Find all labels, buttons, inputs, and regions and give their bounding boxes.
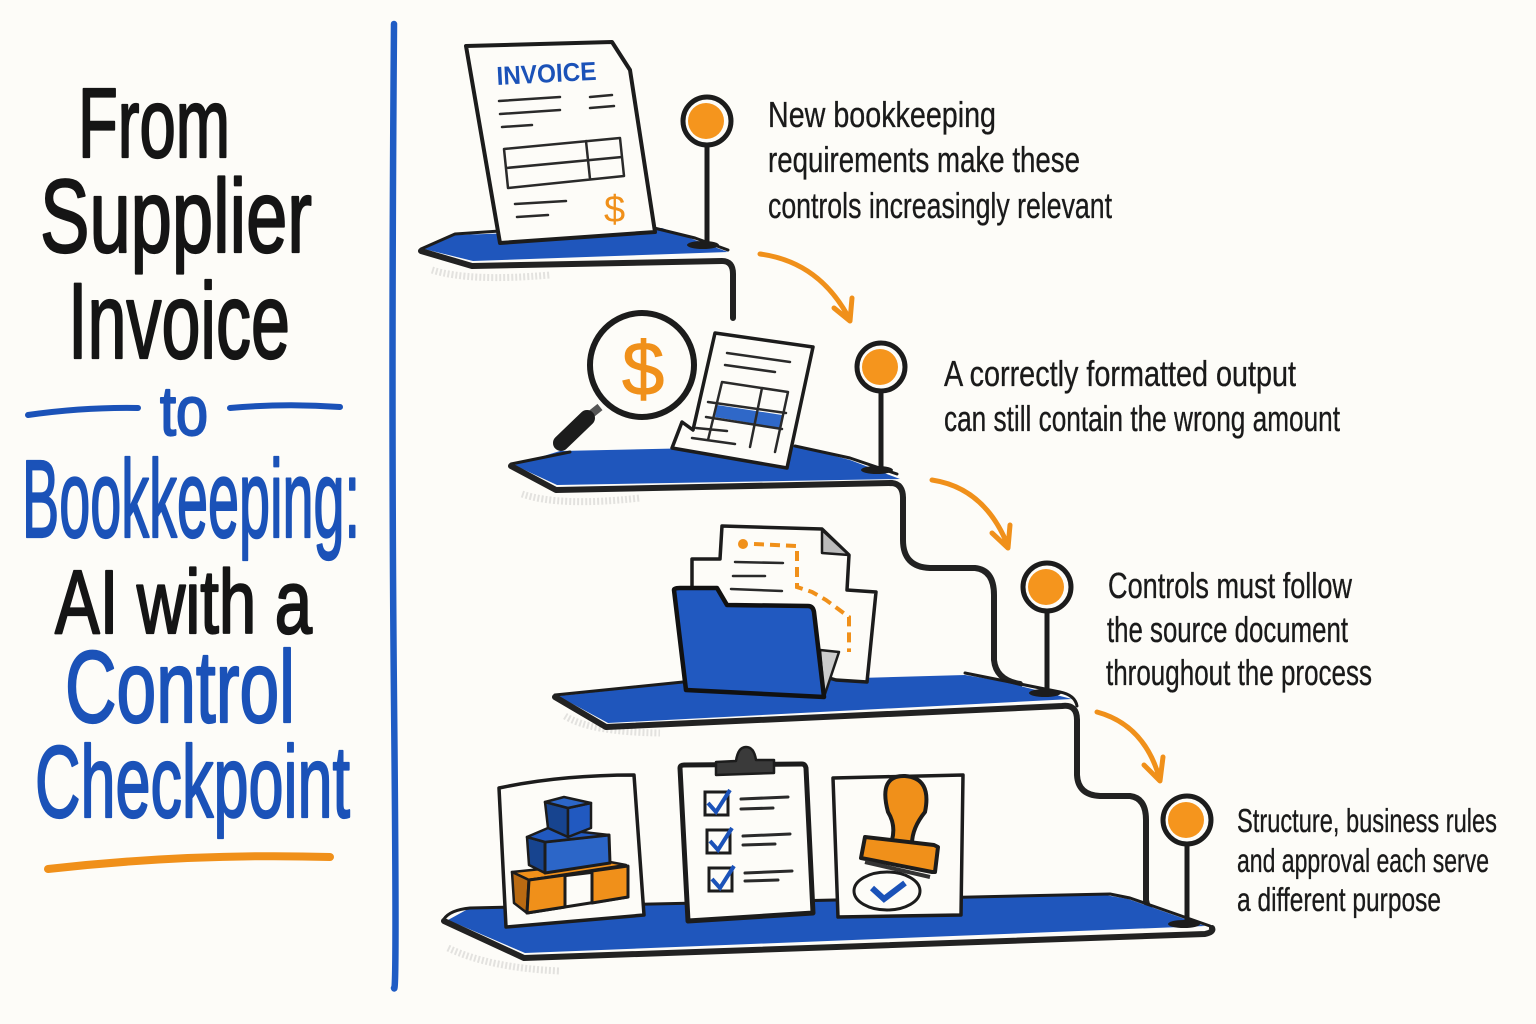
icon: invoice: INVOICE xyxy=(496,56,597,91)
connector path between shelves xyxy=(903,498,1170,920)
text 1 xyxy=(768,94,1112,226)
step 3 xyxy=(555,526,1372,733)
title line: From: From xyxy=(78,68,230,178)
text 1: requirements make these xyxy=(768,139,1080,180)
pin 3 xyxy=(1023,563,1071,697)
title line: to with rules xyxy=(28,372,340,450)
icon: document with table xyxy=(672,333,813,468)
shelf 3 xyxy=(555,673,1077,733)
icon: invoice: $ xyxy=(604,189,625,231)
arrow 1 xyxy=(760,254,852,321)
title line: Invoice: Invoice xyxy=(68,260,290,381)
pin 4 xyxy=(1163,796,1211,928)
text 2: can still contain the wrong amount xyxy=(944,398,1340,439)
text 1: New bookkeeping xyxy=(768,94,996,135)
arrow 3 xyxy=(1097,712,1163,781)
text 3: throughout the process xyxy=(1106,652,1372,693)
title line: Bookkeeping: Bookkeeping: xyxy=(22,438,360,561)
title xyxy=(22,68,360,869)
shelf 1 xyxy=(421,227,733,318)
shelf 4 xyxy=(444,894,1212,971)
text 3: Controls must follow xyxy=(1108,565,1353,606)
icon: approval stamp xyxy=(833,775,963,917)
text 1: controls increasingly relevant xyxy=(768,185,1112,226)
text 2: A correctly formatted output xyxy=(944,353,1296,394)
icon: magnifier with dollar xyxy=(561,313,694,443)
pin 1 xyxy=(683,97,731,249)
text 2 xyxy=(944,353,1340,439)
text 4: a different purpose xyxy=(1237,881,1441,918)
title line: Control: Control xyxy=(65,630,295,744)
vertical divider xyxy=(392,24,396,988)
title line: Checkpoint: Checkpoint xyxy=(35,725,350,839)
icon: building blocks xyxy=(499,775,644,927)
title underline xyxy=(48,856,330,869)
text 4 xyxy=(1237,802,1497,918)
arrow 2 xyxy=(932,480,1010,548)
icon: invoice xyxy=(466,42,655,243)
icon: folder with documents xyxy=(674,526,876,697)
title line: to with rules: to xyxy=(160,372,208,450)
text 3: the source document xyxy=(1107,609,1348,650)
step 1 xyxy=(421,42,1112,318)
pin 2 xyxy=(857,343,905,474)
icon: clipboard checklist xyxy=(680,747,813,921)
step 2 xyxy=(511,313,1340,502)
step 4 xyxy=(444,747,1497,971)
title line: AI with a: AI with a xyxy=(55,553,313,653)
title line: Supplier: Supplier xyxy=(40,159,312,275)
shelf 2 xyxy=(511,446,903,502)
text 3 xyxy=(1106,565,1372,693)
icon: magnifier with dollar: $ xyxy=(622,327,664,412)
